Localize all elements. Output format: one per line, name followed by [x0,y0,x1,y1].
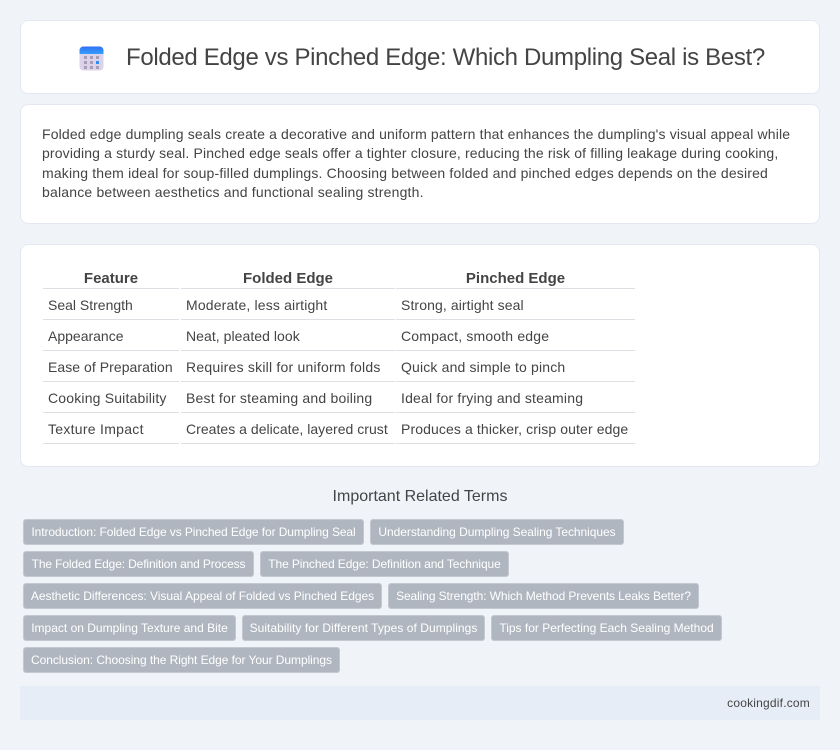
tag [491,615,722,641]
cell: Moderate, less airtight [186,297,327,313]
tag [242,615,485,641]
footer bar [20,686,820,720]
tag [388,583,699,609]
tag [370,519,624,545]
panel: comparison table [20,244,820,467]
tag [23,615,236,641]
icon: calendar [80,46,104,70]
tag: Introduction: Folded Edge vs Pinched Edge for Dumpling Seal [31,525,356,539]
cell: Best for steaming and boiling [186,390,372,406]
tag [23,647,340,673]
text block: summary: providing a sturdy seal. Pinched edge seals offer a tighter closure, reducing the risk of filling leakage during cooking, [42,145,778,161]
cell: Requires skill for uniform folds [186,359,381,375]
table row: Appearance: Appearance [48,328,124,344]
cell: Produces a thicker, crisp outer edge [401,421,628,437]
table row: Cooking Suitability: Cooking Suitability [48,390,167,406]
title: Folded Edge vs Pinched Edge: Which Dumpling Seal is Best? [126,44,765,71]
tag: Conclusion: Choosing the Right Edge for Your Dumplings [31,653,332,667]
table header: Feature: Feature [84,270,138,287]
tag: Understanding Dumpling Sealing Techniques [378,525,616,539]
text block: summary: balance between aesthetics and functional sealing strength. [42,184,424,200]
table row: Ease of Preparation: Ease of Preparation [48,359,173,375]
cell: Quick and simple to pinch [401,359,565,375]
tag: Impact on Dumpling Texture and Bite [31,621,228,635]
tag: Tips for Perfecting Each Sealing Method [499,621,714,635]
panel: title header [20,20,820,94]
table header: Folded Edge: Folded Edge [243,270,333,287]
tag: Sealing Strength: Which Method Prevents Leaks Better? [396,589,691,603]
cell: Ideal for frying and steaming [401,390,583,406]
tag [260,551,509,577]
text block: summary: Folded edge dumpling seals create a decorative and uniform pattern that enhances the dumpling's visual appeal while [42,126,790,142]
footer source text: cookingdif.com [727,696,810,710]
tag [23,551,254,577]
tag: The Pinched Edge: Definition and Technique [268,557,501,571]
text block: summary: making them ideal for soup-filled dumplings. Choosing between folded and pinched edges depends on the desired [42,165,768,181]
text block: summary [42,126,790,200]
tag: The Folded Edge: Definition and Process [32,557,245,571]
tag: Aesthetic Differences: Visual Appeal of Folded vs Pinched Edges [31,589,374,603]
cell: Neat, pleated look [186,328,300,344]
cell: Strong, airtight seal [401,297,524,313]
panel: summary paragraph [20,104,820,224]
cell: Creates a delicate, layered crust [186,421,388,437]
tag [23,583,382,609]
table row: Texture Impact: Texture Impact [48,421,144,437]
heading: related terms: Important Related Terms [333,488,507,505]
tag: Suitability for Different Types of Dumplings [250,621,477,635]
table header: Pinched Edge: Pinched Edge [466,270,565,287]
table row: Seal Strength: Seal Strength [48,297,133,313]
cell: Compact, smooth edge [401,328,549,344]
tag [23,519,364,545]
